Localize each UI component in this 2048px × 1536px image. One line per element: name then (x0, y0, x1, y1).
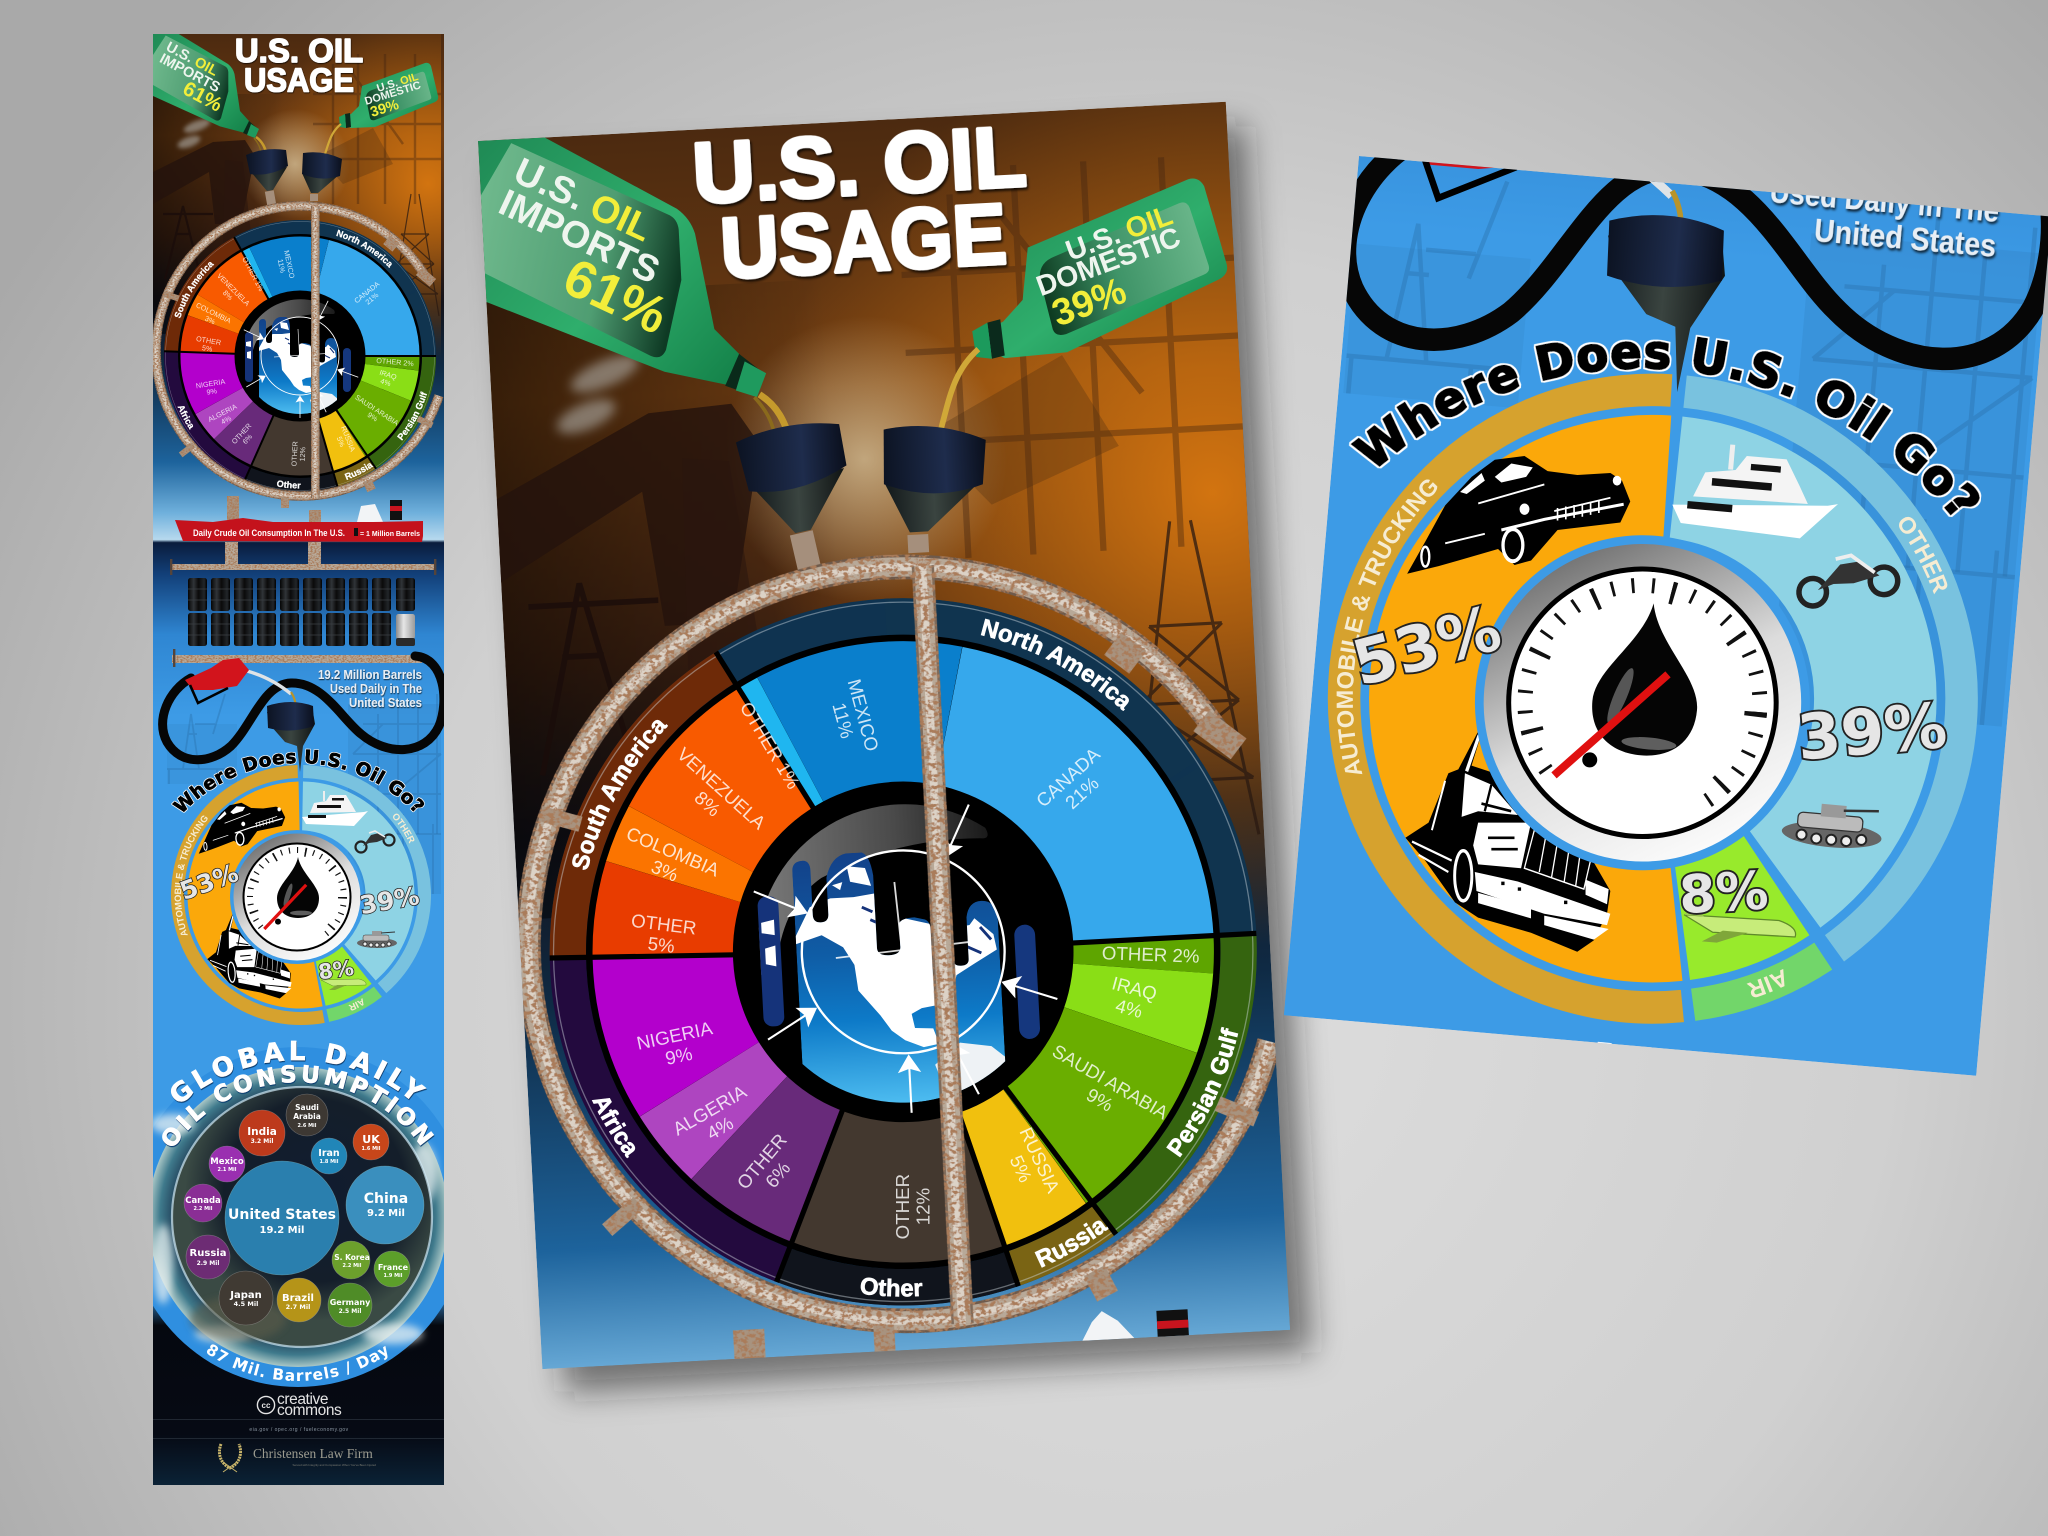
segment labels: 4% (703, 1112, 737, 1144)
bottle: U.S. oil imports 61%: U.S. OIL (508, 149, 659, 249)
segment labels: CANADA (352, 279, 381, 305)
donut band labels: AIR (1742, 961, 1794, 1007)
bubble: Saudi Arabia: Arabia (293, 1112, 321, 1121)
segment labels: 4% (219, 413, 233, 426)
bottle: U.S. oil imports 61% (478, 125, 790, 455)
poster view: center enlarged top section (394, 92, 1393, 1441)
bottle: U.S. oil domestic 39%: U.S. OIL (375, 71, 420, 95)
bubble: United States: United States (228, 1207, 336, 1223)
segment labels: NIGERIA (195, 377, 226, 390)
bottle: U.S. oil imports 61%: IMPORTS (493, 181, 666, 291)
bubble: Germany: 2.5 Mil (339, 1308, 361, 1315)
gauge and where-oil-goes donut: OTHER (393, 814, 414, 844)
text: 19.2 million barrels: Used Daily in The (330, 681, 422, 696)
segment labels: 4% (379, 376, 393, 388)
bubble: UK: 1.6 Mil (361, 1146, 381, 1152)
segment labels: 3% (203, 314, 217, 327)
bubble: Japan: Japan (229, 1290, 262, 1301)
segment labels: MEXICO (844, 677, 883, 753)
percentage: automobile and trucking: 53% (1345, 591, 1508, 701)
bottle: U.S. oil imports 61%: U.S. OIL (163, 39, 221, 80)
region labels: Africa (177, 406, 194, 430)
bubble: Russia: Russia (190, 1248, 226, 1259)
funnels feeding the wheel (246, 149, 342, 206)
segment labels: ALGERIA (669, 1080, 750, 1139)
poster view: right enlarged gauge section (1175, 66, 2048, 1256)
bottle: U.S. oil domestic 39%: 39% (1046, 269, 1132, 334)
bubble: United States (225, 1161, 339, 1275)
funnels feeding the wheel (735, 414, 992, 574)
gauge and where-oil-goes donut: AIR (348, 998, 364, 1010)
heading: global daily oil consumption: GLOBAL DAILY (164, 1037, 432, 1111)
segment labels: IRAQ (1110, 972, 1159, 1004)
oil tanker with consumption banner: Daily Crude Oil Consumption In The U.S. (193, 528, 345, 539)
bottle: U.S. oil domestic 39% (929, 177, 1235, 429)
shadow of center poster (498, 126, 1312, 1392)
bubble: China (346, 1166, 424, 1244)
segment labels: OTHER 2% (1102, 942, 1200, 967)
law firm logo: Served with Integrity and Compassion When You've Been Injured (293, 1463, 376, 1467)
bubble: Canada: 2.2 Mil (193, 1206, 213, 1212)
bottle: U.S. oil domestic 39%: 39% (368, 97, 401, 121)
region labels: Persian Gulf (397, 391, 427, 441)
text: barrels used daily: Used Daily in The (1768, 173, 2001, 229)
creative commons mark: cc (262, 1401, 271, 1410)
segment labels (606, 660, 1215, 1255)
center poster background (478, 102, 1290, 1369)
bubble: United States: 19.2 Mil (260, 1225, 304, 1236)
bubble: India: 3.2 Mil (251, 1138, 273, 1145)
bubble: Saudi Arabia (286, 1094, 328, 1136)
manifold pipes (170, 542, 436, 667)
segment labels: 8% (221, 288, 235, 302)
poster view: full-length infographic strip (153, 34, 444, 1485)
bubble: Brazil: 2.7 Mil (286, 1303, 310, 1311)
bubble: Japan (219, 1271, 273, 1325)
segment labels: NIGERIA (635, 1017, 715, 1054)
bubble: Mexico (209, 1146, 245, 1182)
segment labels: 11% (276, 258, 288, 274)
bubble: UK: UK (362, 1133, 380, 1146)
bubble: S. Korea (332, 1241, 370, 1279)
heading: global daily oil consumption: OIL CONSUMPTION (156, 1062, 440, 1153)
bottle: U.S. oil domestic 39%: DOMESTIC (363, 79, 422, 108)
rusty pipes around the wheel (509, 549, 1287, 1410)
segment labels: OTHER 2% (376, 356, 415, 368)
bubble: Russia: 2.9 Mil (197, 1260, 219, 1267)
gauge and where-oil-goes donut (1183, 229, 2048, 1169)
law firm logo: Christensen Law Firm (253, 1446, 373, 1461)
donut band labels: OTHER (1886, 509, 1960, 599)
wheel chart: sources of U.S. oil (164, 220, 436, 492)
segment labels: 9% (366, 410, 380, 424)
segment labels: 6% (240, 432, 255, 446)
segment labels: OTHER (195, 334, 222, 347)
bottle: U.S. oil domestic 39%: DOMESTIC (1032, 221, 1185, 303)
percentage: air: 8% (1678, 860, 1770, 926)
bubble: France: France (378, 1263, 409, 1272)
segment labels: MEXICO (282, 249, 297, 279)
cropped global heading at bottom edge: GLOBAL DAILY (1266, 1003, 1950, 1247)
segment labels: 3% (648, 856, 681, 886)
bottle: U.S. oil imports 61%: 61% (555, 247, 676, 346)
bubble: UK (353, 1124, 389, 1160)
region labels: Persian Gulf (1156, 1025, 1251, 1163)
creative commons mark (257, 1391, 342, 1419)
fuel nozzle, hose and funnel (163, 656, 444, 772)
segment labels: RUSSIA (1016, 1124, 1064, 1196)
bubble: Germany: Germany (330, 1298, 371, 1307)
bubble: Saudi Arabia: 2.6 Mil (297, 1123, 317, 1129)
global consumption: blue ring, earth and bubbles (153, 1047, 444, 1387)
region labels: North America (336, 230, 392, 268)
bottle: U.S. oil imports 61%: 61% (179, 77, 226, 117)
percentage: other: 39% (1794, 689, 1950, 775)
region labels (174, 230, 427, 489)
gauge and where-oil-goes donut: 8% (317, 956, 355, 984)
region labels: Other (857, 1270, 923, 1305)
bubble: China: 9.2 Mil (367, 1208, 405, 1219)
donut band labels: AUTOMOBILE & TRUCKING (1324, 466, 1445, 786)
bubble: Canada (184, 1184, 222, 1222)
title: USAGE (718, 186, 1009, 297)
segment labels: OTHER (289, 441, 300, 467)
segment labels: IRAQ (378, 368, 398, 382)
bubble: S. Korea: 2.2 Mil (342, 1263, 362, 1269)
gauge and where-oil-goes donut: Where Does U.S. Oil Go? (171, 748, 425, 813)
gauge and where-oil-goes donut: AUTOMOBILE & TRUCKING (174, 816, 208, 936)
bottle: U.S. oil imports 61%: IMPORTS (157, 51, 223, 96)
segment labels: VENEZUELA (673, 743, 770, 834)
segment labels: OTHER (733, 1130, 791, 1193)
segment labels: 11% (828, 700, 858, 741)
title: U.S. OIL (690, 108, 1028, 222)
bubble: France: 1.9 Mil (383, 1273, 403, 1279)
bubble: Brazil (277, 1278, 321, 1322)
strip background (153, 34, 444, 1485)
segment labels: 5% (201, 343, 214, 354)
region labels: South America (174, 262, 214, 318)
wheel chart: sources of U.S. oil (414, 463, 1393, 1441)
segment labels: ALGERIA (206, 402, 239, 424)
creative commons mark: commons (277, 1402, 342, 1419)
right poster background (1284, 156, 2048, 1076)
segment labels: OTHER (892, 1174, 913, 1239)
bubble: Saudi Arabia: Saudi (295, 1103, 319, 1112)
segment labels: 5% (335, 435, 347, 449)
region labels: Russia (1030, 1210, 1114, 1274)
bottle: U.S. oil domestic 39%: U.S. OIL (1062, 199, 1177, 268)
segment labels: 21% (1061, 772, 1103, 813)
text: 19.2 million barrels: 19.2 Million Barrels (318, 667, 422, 682)
oil tanker with consumption banner (175, 500, 423, 542)
bubble: Japan: 4.5 Mil (234, 1300, 258, 1308)
bubble: Mexico: 2.1 Mil (217, 1167, 237, 1173)
segment labels: 9% (206, 386, 218, 397)
segment labels: 9% (1083, 1084, 1117, 1116)
bubble: Iran (311, 1138, 347, 1174)
region labels: North America (977, 607, 1138, 723)
segment labels: OTHER 1% (240, 255, 266, 293)
bubble: Canada: Canada (185, 1196, 221, 1206)
sources line (153, 1420, 444, 1438)
bubble: India (239, 1110, 285, 1156)
bubble: Mexico: Mexico (210, 1157, 244, 1167)
region labels: Africa (586, 1089, 645, 1164)
bottle: U.S. oil domestic 39% (325, 63, 438, 154)
bubble: S. Korea: S. Korea (334, 1253, 370, 1262)
segment labels: 5% (1006, 1152, 1036, 1185)
law firm logo (219, 1444, 376, 1472)
segment labels: COLOMBIA (623, 823, 723, 881)
sources line: eia.gov / opec.org / fueleconomy.gov (249, 1427, 349, 1433)
region labels: Russia (344, 463, 374, 480)
region labels: South America (559, 710, 680, 874)
segment labels: OTHER (230, 421, 253, 446)
segment labels: 8% (690, 787, 725, 821)
text: 19.2 million barrels: United States (349, 695, 422, 710)
region labels (555, 602, 1257, 1319)
rusty pipes around the wheel (156, 206, 439, 523)
gauge and where-oil-goes donut (171, 748, 431, 1025)
bubble: India: India (247, 1126, 277, 1138)
segment labels: SAUDI ARABIA (354, 393, 400, 428)
bottle: U.S. oil imports 61% (153, 34, 267, 155)
bubble: Brazil: Brazil (282, 1293, 314, 1304)
segment labels: 12% (913, 1188, 934, 1225)
text: barrels used daily: United States (1813, 212, 1998, 264)
region labels: Other (276, 480, 301, 489)
barrels: 19.2 million, one per million (188, 578, 415, 646)
segment labels: 21% (363, 290, 381, 307)
caption: 87 million barrels per day: 87 Mil. Barrels / Day (203, 1340, 393, 1385)
heading: where does U.S. oil go: Where Does U.S. Oil Go? (1342, 298, 2004, 533)
title: USAGE (244, 62, 354, 98)
bubble: France (374, 1251, 410, 1287)
segment labels: COLOMBIA (195, 300, 233, 325)
segment labels (191, 249, 415, 467)
segment labels: OTHER (630, 910, 698, 939)
segment labels: 9% (663, 1043, 694, 1069)
segment labels: OTHER 1% (736, 698, 804, 793)
segment labels: 5% (647, 933, 676, 957)
bubble: Iran: 1.8 Mil (319, 1159, 339, 1165)
segment labels: 6% (761, 1158, 794, 1192)
oil tanker with consumption banner: = 1 Million Barrels (360, 529, 420, 538)
gauge and where-oil-goes donut: 53% (176, 858, 242, 906)
bubble: Russia (186, 1235, 230, 1279)
segment labels: 4% (1113, 995, 1145, 1022)
creative commons mark: creative (277, 1391, 328, 1408)
gauge and where-oil-goes donut: 39% (358, 881, 422, 920)
bubble: Iran: Iran (318, 1148, 340, 1159)
bubble: China: China (364, 1191, 408, 1207)
segment labels: CANADA (1032, 743, 1104, 811)
segment labels: VENEZUELA (215, 271, 252, 308)
segment labels: RUSSIA (339, 425, 358, 453)
tanker superstructure peeking at bottom edge (1081, 1307, 1189, 1341)
title: U.S. OIL (235, 32, 363, 69)
segment labels: SAUDI ARABIA (1049, 1040, 1172, 1124)
bubble: Germany (328, 1283, 372, 1327)
donut band labels (1307, 461, 1960, 1018)
hose and funnel (1335, 73, 2048, 423)
segment labels: 12% (298, 446, 307, 462)
